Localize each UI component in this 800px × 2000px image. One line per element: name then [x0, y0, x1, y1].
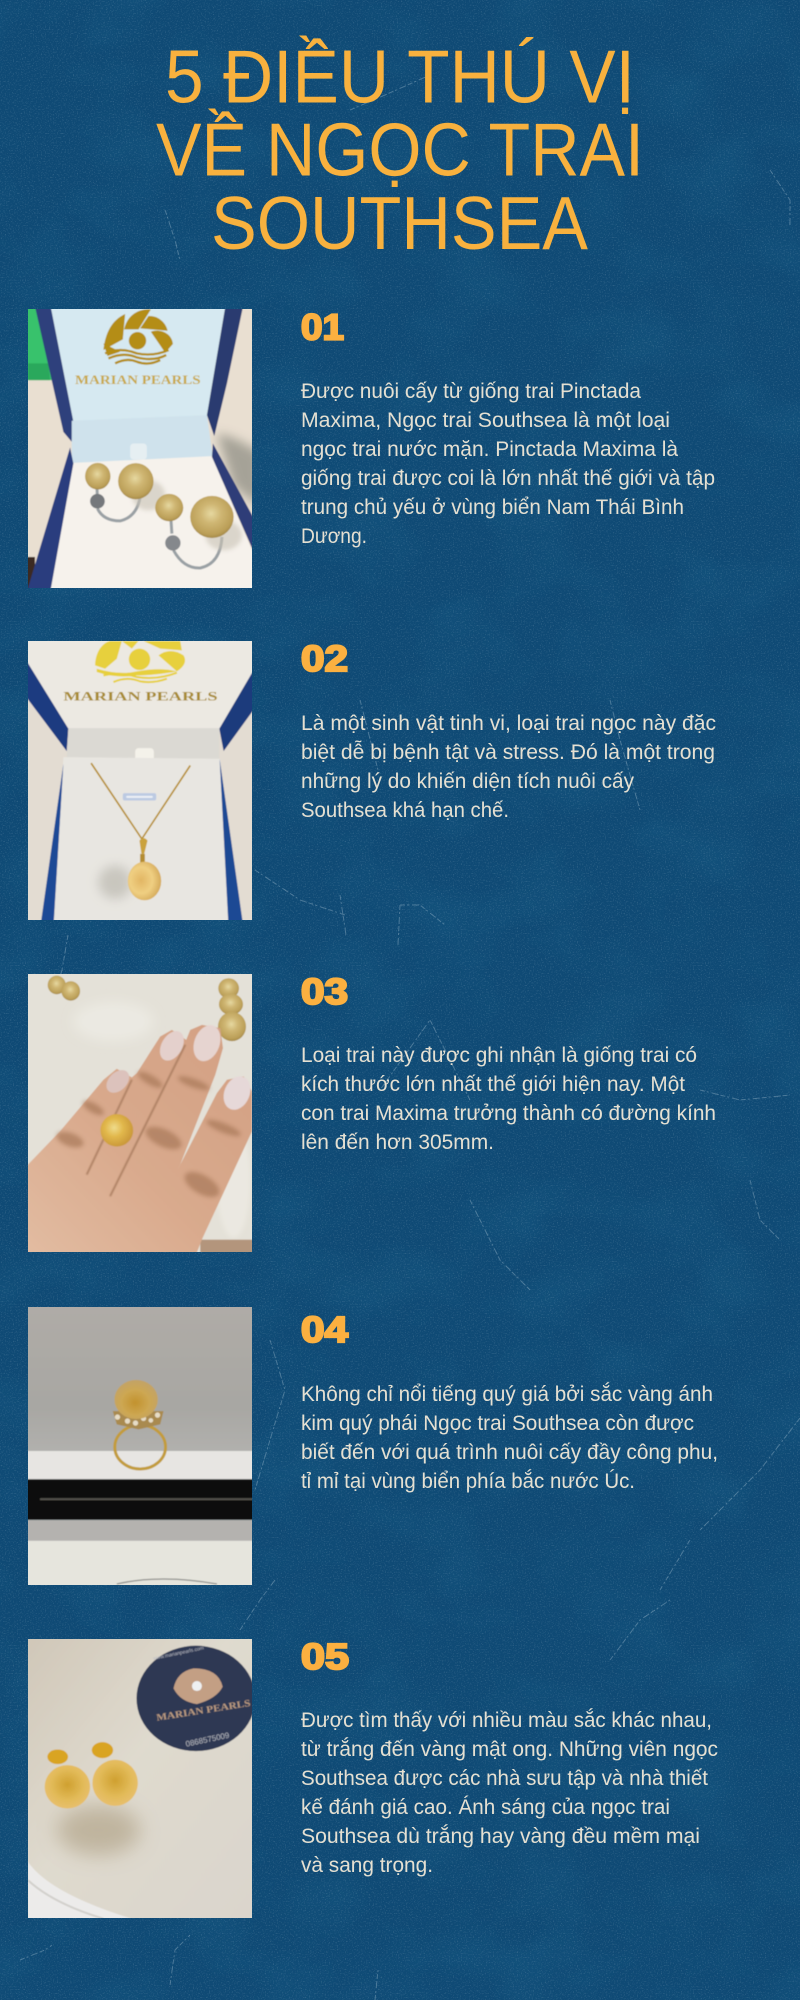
text block 05: từ trắng đến vàng mật ong. Những viên ngọc — [301, 1738, 718, 1761]
title — [156, 34, 644, 265]
text block 05: và sang trọng. — [301, 1854, 433, 1877]
text block 01: Được nuôi cấy từ giống trai Pinctada — [301, 380, 641, 403]
text block 05 — [301, 1709, 718, 1877]
photo 2: pendant necklace in box: MARIAN PEARLS — [63, 689, 218, 703]
text block 01: Maxima, Ngọc trai Southsea là một loại — [301, 409, 670, 432]
text block 05: Được tìm thấy với nhiều màu sắc khác nhau, — [301, 1709, 712, 1732]
text block 04: tỉ mỉ tại vùng biển phía bắc nước Úc. — [301, 1470, 635, 1493]
photo 2: pendant necklace in box — [28, 641, 252, 920]
text block 05: Southsea được các nhà sưu tập và nhà thiết — [301, 1767, 708, 1790]
photo 3: hand with golden pearl — [28, 974, 252, 1252]
text block 02: Là một sinh vật tinh vi, loại trai ngọc này đặc — [301, 712, 716, 735]
text block 01: ngọc trai nước mặn. Pinctada Maxima là — [301, 438, 678, 461]
title: VỀ NGỌC TRAI — [156, 108, 644, 192]
round card — [136, 1645, 255, 1751]
earring backs — [47, 1742, 113, 1764]
text block 01: trung chủ yếu ở vùng biển Nam Thái Bình — [301, 496, 684, 519]
text block 02: Southsea khá hạn chế. — [301, 799, 509, 822]
number 02: 02 — [301, 638, 348, 679]
number 01: 01 — [301, 306, 344, 348]
diamond cluster — [113, 1411, 164, 1429]
number 04: 04 — [301, 1309, 348, 1350]
text block 02: biệt dễ bị bệnh tật và stress. Đó là một trong — [301, 741, 715, 764]
hand — [20, 1021, 255, 1261]
number 05: 05 — [301, 1636, 349, 1677]
title: SOUTHSEA — [211, 181, 588, 265]
text block 03: Loại trai này được ghi nhận là giống trai có — [301, 1044, 697, 1067]
text block 02: những lý do khiến diện tích nuôi cấy — [301, 770, 634, 793]
round card: www.marianpearls.com — [153, 1645, 205, 1662]
text block 01 — [301, 380, 715, 548]
text block 05: kế đánh giá cao. Ánh sáng của ngọc trai — [301, 1796, 670, 1819]
photo 5: stud earrings and business card — [28, 1639, 252, 1918]
text block 04: biết đến với quá trình nuôi cấy đầy công phu, — [301, 1441, 718, 1464]
text block 01: giống trai được coi là lớn nhất thế giới và tập — [301, 467, 715, 490]
text block 03: con trai Maxima trưởng thành có đường kính — [301, 1102, 716, 1125]
text block 04 — [301, 1383, 718, 1493]
text block 04: Không chỉ nổi tiếng quý giá bởi sắc vàng ánh — [301, 1383, 713, 1406]
text block 04: kim quý phái Ngọc trai Southsea còn được — [301, 1412, 694, 1435]
earring wires — [97, 482, 222, 568]
text block 03: kích thước lớn nhất thế giới hiện nay. Một — [301, 1073, 685, 1096]
text block 03: lên đến hơn 305mm. — [301, 1131, 494, 1154]
loose pearls — [48, 976, 246, 1041]
photo 4: pearl ring on shelf — [28, 1307, 252, 1585]
text block 03 — [301, 1044, 716, 1154]
photo 1: earrings in Marian Pearls box: MARIAN PEARLS — [75, 373, 201, 387]
text block 05: Southsea dù trắng hay vàng đều mềm mại — [301, 1825, 700, 1848]
round card: MARIAN PEARLS — [156, 1698, 251, 1724]
logo: yellow gold — [95, 641, 185, 682]
text block 02 — [301, 712, 716, 822]
round card: 0868575009 — [185, 1731, 231, 1749]
number 03: 03 — [301, 971, 348, 1012]
logo: Marian Pearls gold — [103, 309, 173, 364]
photo 1: earrings in Marian Pearls box — [28, 309, 252, 588]
title: 5 ĐIỀU THÚ VỊ — [165, 34, 635, 118]
text block 01: Dương. — [301, 525, 367, 548]
